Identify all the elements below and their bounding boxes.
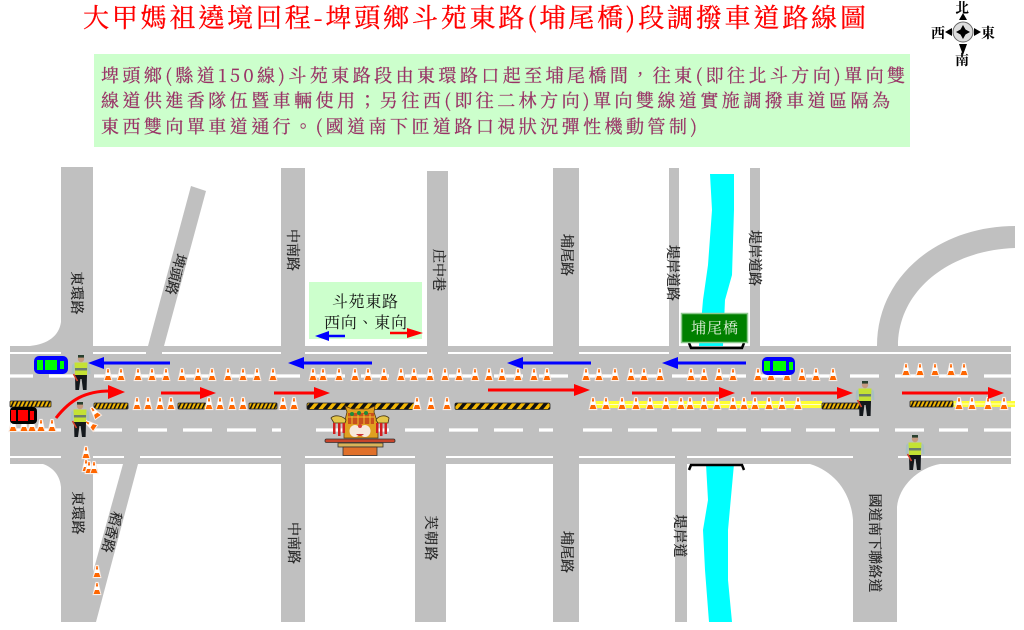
traffic cones: barrier row [133, 397, 1008, 410]
road label: 堤岸道路 east: 堤岸道路 [745, 230, 765, 286]
traffic cones: centre line row [104, 363, 968, 381]
road markings [10, 353, 1011, 457]
sign: 埔尾橋 bridge: 埔尾橋 [691, 317, 738, 338]
icon: compass: 西 [931, 23, 945, 43]
road label: 國道南下聯絡道: 國道南下聯絡道 [865, 494, 885, 592]
legend: road direction: 西向、東向 [324, 310, 407, 333]
car: blue and green, west [34, 356, 68, 374]
legend: road direction: 斗苑東路 [332, 289, 398, 312]
icon: compass: 南 [955, 50, 969, 70]
road label: 埔尾路 south: 埔尾路 [557, 531, 577, 573]
road label: 東環路 north: 東環路 [67, 272, 87, 314]
icon: compass: 東 [981, 23, 995, 43]
icon: Mazu palanquin [325, 406, 395, 456]
icon: compass [931, 0, 995, 70]
traffic officer 2 [70, 402, 90, 437]
road label: 堤岸道: 堤岸道 [670, 514, 690, 558]
road label: 中南路 north: 中南路 [283, 229, 303, 271]
road label: 芙朝路: 芙朝路 [421, 516, 441, 560]
road label: 庄中巷: 庄中巷 [429, 249, 449, 291]
road label: 埤頭路: 埤頭路 [161, 251, 191, 297]
legend: road direction [309, 282, 423, 341]
road label: 堤岸道路 west: 堤岸道路 [663, 245, 683, 301]
panel: route description: 線道供進香隊伍暨車輛使用；另往西(即往二林方向)單向雙線道實施調撥車道區隔為 [101, 87, 890, 113]
yellow lane barrier lines [590, 401, 1015, 408]
road label: 中南路 south: 中南路 [284, 522, 304, 564]
panel: route description: 埤頭鄉(縣道150線)斗苑東路段由東環路口起至埔尾橋間，往東(即往北斗方向)單向雙 [101, 62, 905, 88]
panel: route description: 東西雙向單車道通行。(國道南下匝道路口視狀況彈性機動管制) [101, 113, 697, 139]
panel: route description [94, 54, 910, 147]
traffic officer 4 [906, 435, 924, 470]
road label: 稻香路: 稻香路 [97, 509, 127, 555]
sign: 埔尾橋 bridge [682, 314, 748, 348]
car: blue and green, east [762, 357, 795, 375]
road label: 東環路 south: 東環路 [68, 492, 88, 534]
eastbound red arrows [56, 384, 1004, 418]
westbound blue arrows [88, 357, 746, 369]
car: red and black [10, 407, 37, 424]
traffic officer 3 [856, 381, 874, 416]
road network [10, 167, 1015, 622]
river [699, 174, 734, 622]
road label: 埔尾路 north: 埔尾路 [557, 234, 577, 276]
traffic cones: junction at 東環路 [9, 405, 102, 595]
black and yellow lane barriers [10, 401, 953, 410]
icon: lower bridge bracket [689, 465, 744, 470]
traffic officer 1 [72, 355, 90, 390]
